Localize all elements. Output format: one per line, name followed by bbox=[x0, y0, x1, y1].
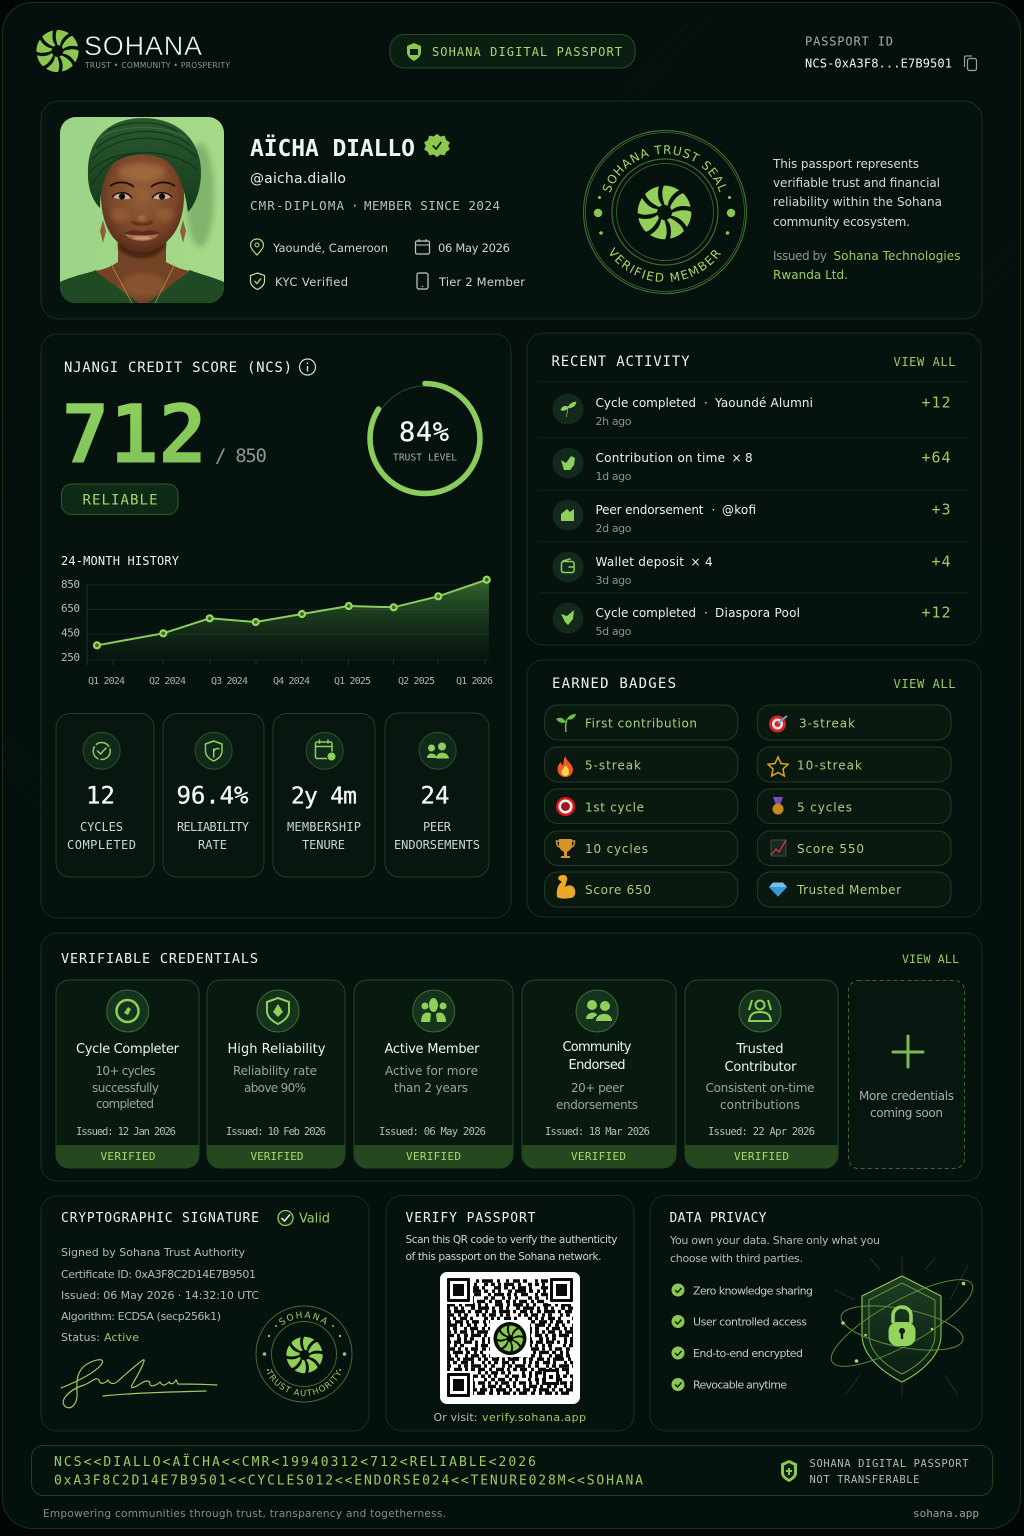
credential: cycle completer: VERIFIED bbox=[100, 1150, 156, 1163]
activity row: endorsement: 2d ago bbox=[596, 522, 632, 535]
passport id: PASSPORT ID bbox=[805, 34, 893, 48]
panel: data privacy bbox=[650, 1196, 983, 1431]
line chart: 24 month history: Q3 2024 bbox=[211, 676, 248, 687]
credential: more coming soon: More credentials bbox=[859, 1089, 954, 1103]
signature details: Active bbox=[104, 1331, 139, 1344]
stat: cycles completed: CYCLES bbox=[80, 820, 123, 834]
badge: 5 cycles: 5 cycles bbox=[797, 800, 852, 814]
trust gauge: 84% bbox=[399, 417, 449, 448]
tier bbox=[417, 273, 525, 289]
activity row: cycle yaounde: 2h ago bbox=[596, 415, 632, 428]
credential: high reliability: Issued: 10 Feb 2026 bbox=[226, 1126, 326, 1138]
panel: verifiable credentials bbox=[41, 933, 982, 1181]
panel: cryptographic signature bbox=[40, 1196, 370, 1432]
privacy checklist: Revocable anytime bbox=[693, 1378, 787, 1392]
member line: MEMBER SINCE 2024 bbox=[364, 198, 500, 213]
nose bbox=[132, 221, 152, 225]
logo mark bbox=[34, 28, 81, 74]
credential: active member: Active Member bbox=[384, 1042, 480, 1057]
line chart: 24 month history: 450 bbox=[61, 626, 80, 640]
badge: 1st cycle bbox=[545, 789, 738, 824]
machine readable zone bbox=[32, 1446, 992, 1496]
line chart: 24 month history bbox=[61, 577, 493, 687]
header bbox=[34, 28, 977, 74]
badge: 10 cycles bbox=[545, 831, 738, 866]
credential: active member: VERIFIED bbox=[406, 1150, 461, 1163]
member line: · bbox=[351, 198, 359, 213]
credential: community endorsed: VERIFIED bbox=[571, 1150, 626, 1163]
panel: profile bbox=[40, 100, 982, 320]
signature details: Signed by Sohana Trust Authority bbox=[61, 1246, 245, 1259]
issuer bbox=[773, 249, 960, 282]
line chart: 24 month history: Q1 2024 bbox=[88, 676, 125, 687]
panel: verify passport bbox=[386, 1196, 634, 1431]
credential: community endorsed: endorsements bbox=[556, 1098, 638, 1112]
valid status: Valid bbox=[299, 1212, 330, 1226]
credential: trusted contributor: Consistent on-time bbox=[706, 1081, 814, 1095]
badge: 3-streak bbox=[757, 705, 951, 740]
description bbox=[669, 1234, 880, 1265]
activity row: wallet: × bbox=[690, 555, 701, 569]
badge: score 650: Score 650 bbox=[585, 883, 651, 897]
line chart: 24 month history: 850 bbox=[61, 578, 80, 591]
line chart: 24 month history: 250 bbox=[61, 651, 80, 664]
stat: reliability rate: 96.4% bbox=[176, 782, 249, 810]
turban bbox=[88, 118, 201, 212]
badge: trusted member bbox=[757, 872, 951, 907]
privacy checklist: End-to-end encrypted bbox=[693, 1347, 803, 1360]
activity row: cycle diaspora: +12 bbox=[922, 604, 950, 622]
credential: cycle completer: completed bbox=[96, 1097, 154, 1111]
member line: CMR-DIPLOMA bbox=[250, 198, 344, 213]
credential: cycle completer: successfully bbox=[92, 1081, 159, 1095]
badge: score 650 bbox=[545, 872, 738, 907]
credential: community endorsed: 20+ peer bbox=[571, 1081, 624, 1095]
stat: membership tenure: TENURE bbox=[302, 838, 345, 852]
badge: 10-streak bbox=[757, 747, 951, 782]
credential: cycle completer bbox=[56, 980, 199, 1168]
stat: cycles completed: COMPLETED bbox=[67, 838, 136, 852]
date bbox=[416, 239, 510, 255]
member line bbox=[250, 198, 500, 213]
handwritten signature bbox=[61, 1360, 217, 1408]
activity row: cycle diaspora: 5d ago bbox=[596, 625, 632, 638]
panel: recent activity bbox=[527, 333, 981, 645]
credential: high reliability: Reliability rate bbox=[233, 1064, 317, 1078]
badge: 10 cycles: 10 cycles bbox=[585, 842, 648, 856]
line chart: 24 month history: Q2 2025 bbox=[398, 676, 435, 687]
score value: 712 bbox=[61, 388, 207, 482]
date: 06 May 2026 bbox=[438, 241, 510, 255]
machine readable zone: 0xA3F8C2D14E7B9501<<CYCLES012<<ENDORSE024<<TENURE028M<<SOHANA bbox=[54, 1474, 643, 1488]
kyc: KYC Verified bbox=[275, 275, 348, 289]
icon: shield with lock bbox=[821, 1257, 983, 1397]
credential: high reliability bbox=[207, 980, 345, 1168]
credential: more coming soon: coming soon bbox=[870, 1106, 943, 1120]
face bbox=[101, 150, 184, 252]
credential: trusted contributor: contributions bbox=[720, 1098, 800, 1112]
description: of this passport on the Sohana network. bbox=[406, 1251, 602, 1263]
issuer: Issued by bbox=[773, 249, 827, 263]
tier: Tier 2 Member bbox=[438, 275, 525, 289]
passport id bbox=[805, 34, 976, 70]
view all link: VIEW ALL bbox=[894, 677, 956, 691]
trust seal bbox=[582, 130, 748, 294]
credential: community endorsed bbox=[522, 980, 676, 1168]
reliable pill bbox=[62, 484, 178, 514]
score max: / 850 bbox=[215, 445, 267, 467]
activity row: wallet: 3d ago bbox=[596, 574, 632, 587]
credential: cycle completer: 10+ cycles bbox=[96, 1064, 156, 1078]
passport id: NCS-0xA3F8...E7B9501 bbox=[805, 56, 952, 70]
activity row: cycle yaounde: +12 bbox=[922, 394, 950, 412]
panel: njangi credit score bbox=[41, 334, 511, 918]
not transferable note: SOHANA DIGITAL PASSPORT bbox=[810, 1458, 969, 1470]
stat: membership tenure bbox=[273, 714, 375, 877]
activity row: cycle yaounde bbox=[552, 394, 950, 428]
footer bbox=[43, 1507, 979, 1520]
stat: peer endorsements: PEER bbox=[423, 820, 452, 834]
activity row: cycle diaspora bbox=[552, 602, 950, 638]
stat: reliability rate: RATE bbox=[198, 838, 227, 852]
passport description: This passport represents bbox=[772, 157, 919, 171]
activity row: cycle diaspora: Diaspora Pool bbox=[715, 606, 800, 620]
credential: trusted contributor: Trusted bbox=[736, 1042, 784, 1057]
trust seal: VERIFIED MEMBER bbox=[610, 247, 722, 282]
activity row: contribution: Contribution on time bbox=[596, 451, 725, 465]
trust gauge bbox=[370, 384, 480, 494]
description: choose with third parties. bbox=[670, 1252, 803, 1265]
credential: high reliability: High Reliability bbox=[228, 1042, 326, 1057]
stat: membership tenure: MEMBERSHIP bbox=[287, 820, 361, 834]
activity row: cycle yaounde: Yaoundé Alumni bbox=[714, 396, 813, 410]
activity row: cycle yaounde: · bbox=[704, 396, 708, 410]
title pill: SOHANA DIGITAL PASSPORT bbox=[432, 45, 622, 59]
lips bbox=[124, 230, 160, 235]
footer: sohana.app bbox=[913, 1507, 979, 1520]
badge: 1st cycle: 1st cycle bbox=[585, 800, 644, 814]
credential: trusted contributor: VERIFIED bbox=[734, 1150, 789, 1163]
credential: more coming soon bbox=[848, 980, 964, 1168]
credential: cycle completer: Cycle Completer bbox=[76, 1042, 180, 1057]
line chart: 24 month history: Q1 2026 bbox=[456, 676, 493, 687]
badge: trusted member: Trusted Member bbox=[796, 883, 901, 897]
badge: score 550 bbox=[757, 831, 951, 866]
activity row: cycle diaspora: · bbox=[704, 606, 708, 620]
activity row: endorsement: Peer endorsement bbox=[596, 503, 704, 517]
panel: earned badges bbox=[527, 660, 981, 917]
stat: membership tenure: 2y 4m bbox=[291, 784, 357, 810]
credential: trusted contributor: Issued: 22 Apr 2026 bbox=[708, 1126, 815, 1138]
credential: high reliability: VERIFIED bbox=[250, 1150, 304, 1163]
verify link: Or visit: bbox=[434, 1411, 478, 1424]
kyc bbox=[250, 273, 348, 290]
badge: 5 cycles bbox=[757, 789, 951, 824]
stat: cycles completed: 12 bbox=[86, 782, 115, 810]
panel heading: DATA PRIVACY bbox=[670, 1211, 767, 1226]
icon: verified badge bbox=[424, 134, 450, 157]
not transferable note bbox=[810, 1458, 969, 1486]
icon: shield badge bbox=[781, 1460, 797, 1482]
credential: community endorsed: Community bbox=[562, 1040, 632, 1055]
badge: first contribution: First contribution bbox=[585, 716, 697, 730]
portrait photo bbox=[60, 117, 224, 306]
line chart: 24 month history: 650 bbox=[61, 602, 80, 615]
trust seal: SOHANA TRUST SEAL bbox=[602, 145, 726, 192]
reliable pill: RELIABLE bbox=[82, 492, 158, 508]
activity row: contribution bbox=[552, 448, 950, 483]
activity row: contribution: 1d ago bbox=[596, 470, 632, 483]
name: AÏCHA DIALLO bbox=[250, 134, 415, 162]
stat: peer endorsements: 24 bbox=[420, 782, 450, 810]
panel heading: NJANGI CREDIT SCORE (NCS) bbox=[64, 360, 292, 376]
line chart: 24 month history: Q4 2024 bbox=[273, 676, 310, 687]
panel heading: VERIFIABLE CREDENTIALS bbox=[61, 951, 258, 967]
description bbox=[406, 1234, 618, 1263]
passport description: reliability within the Sohana bbox=[773, 195, 942, 209]
activity row: cycle yaounde: Cycle completed bbox=[596, 396, 696, 410]
trust gauge: TRUST LEVEL bbox=[393, 452, 457, 464]
activity row: contribution: +64 bbox=[922, 448, 950, 466]
brand name: SOHANA bbox=[84, 31, 202, 61]
privacy checklist bbox=[672, 1284, 813, 1392]
activity row: endorsement: · bbox=[712, 503, 715, 517]
signature details: Issued: 06 May 2026 · 14:32:10 UTC bbox=[61, 1289, 259, 1302]
verify link: verify.sohana.app bbox=[482, 1411, 586, 1424]
activity row: cycle diaspora: Cycle completed bbox=[596, 606, 696, 620]
activity row: wallet: 4 bbox=[705, 555, 713, 569]
footer: Empowering communities through trust, transparency and togetherness. bbox=[43, 1508, 446, 1520]
signature details: Algorithm: ECDSA (secp256k1) bbox=[61, 1310, 221, 1323]
credential: active member bbox=[354, 980, 513, 1168]
credential: active member: Active for more bbox=[385, 1064, 478, 1078]
brows and eyes bbox=[110, 182, 175, 187]
tagline: TRUST • COMMUNITY • PROSPERITY bbox=[84, 61, 230, 70]
qr code bbox=[440, 1272, 580, 1404]
machine readable zone: NCS<<DIALLO<AÏCHA<<CMR<19940312<712<RELIABLE<2026 bbox=[54, 1454, 536, 1470]
icon: info bbox=[300, 359, 316, 375]
description: You own your data. Share only what you bbox=[669, 1234, 880, 1247]
location: Yaoundé, Cameroon bbox=[272, 241, 388, 255]
credential: trusted contributor bbox=[685, 980, 838, 1168]
verify link bbox=[434, 1411, 586, 1424]
valid status bbox=[278, 1210, 330, 1226]
view all link: VIEW ALL bbox=[902, 952, 959, 966]
stat: peer endorsements: ENDORSEMENTS bbox=[394, 838, 480, 852]
issuer: Rwanda Ltd. bbox=[773, 268, 848, 282]
panel heading: CRYPTOGRAPHIC SIGNATURE bbox=[61, 1211, 259, 1226]
stat: reliability rate bbox=[163, 714, 264, 877]
signature details: Certificate ID: 0xA3F8C2D14E7B9501 bbox=[61, 1268, 256, 1281]
badge: 3-streak: 3-streak bbox=[799, 716, 855, 730]
privacy checklist: Zero knowledge sharing bbox=[693, 1284, 813, 1298]
credential: active member: than 2 years bbox=[394, 1081, 468, 1095]
activity row: contribution: × bbox=[732, 451, 742, 465]
privacy checklist: User controlled access bbox=[693, 1316, 807, 1328]
passport description bbox=[772, 157, 942, 229]
badge: 5-streak: 5-streak bbox=[585, 758, 641, 772]
activity row: contribution: 8 bbox=[745, 451, 753, 465]
chart heading: 24-MONTH HISTORY bbox=[61, 554, 180, 568]
stat: reliability rate: RELIABILITY bbox=[177, 820, 250, 834]
activity row: endorsement: +3 bbox=[932, 500, 950, 518]
credential: community endorsed: Issued: 18 Mar 2026 bbox=[545, 1126, 650, 1138]
view all link: VIEW ALL bbox=[894, 355, 956, 369]
activity row: endorsement bbox=[552, 500, 950, 535]
activity row: wallet: +4 bbox=[932, 552, 950, 570]
activity row: endorsement: @kofi bbox=[722, 503, 756, 517]
credential: high reliability: above 90% bbox=[244, 1081, 306, 1095]
badge: first contribution bbox=[545, 705, 738, 740]
line chart: 24 month history: Q2 2024 bbox=[149, 676, 186, 687]
stat: peer endorsements bbox=[385, 713, 489, 877]
description: Scan this QR code to verify the authenticity bbox=[406, 1234, 618, 1246]
signature details: Status: bbox=[61, 1331, 100, 1344]
not transferable note: NOT TRANSFERABLE bbox=[810, 1474, 920, 1486]
credential: active member: Issued: 06 May 2026 bbox=[379, 1126, 486, 1138]
passport description: community ecosystem. bbox=[773, 215, 910, 229]
credential: trusted contributor: Contributor bbox=[724, 1060, 797, 1075]
credential: cycle completer: Issued: 12 Jan 2026 bbox=[76, 1126, 176, 1138]
badge: score 550: Score 550 bbox=[797, 842, 864, 856]
trust authority seal: TRUST AUTHORITY bbox=[267, 1368, 341, 1396]
panel heading: EARNED BADGES bbox=[552, 676, 676, 692]
trust authority seal bbox=[256, 1306, 352, 1402]
activity row: wallet bbox=[552, 552, 950, 587]
clothes left bbox=[60, 270, 224, 306]
panel heading: RECENT ACTIVITY bbox=[552, 354, 690, 370]
earrings bbox=[100, 220, 106, 243]
line chart: 24 month history: Q1 2025 bbox=[334, 676, 371, 687]
badge: 5-streak bbox=[545, 747, 738, 782]
signature details bbox=[61, 1246, 259, 1344]
badge: 10-streak: 10-streak bbox=[797, 758, 862, 772]
stat: cycles completed bbox=[56, 714, 154, 877]
credential: community endorsed: Endorsed bbox=[568, 1058, 626, 1073]
passport description: verifiable trust and financial bbox=[773, 176, 940, 190]
title pill bbox=[390, 34, 635, 68]
trust authority seal: SOHANA bbox=[279, 1312, 326, 1325]
panel heading: VERIFY PASSPORT bbox=[406, 1211, 536, 1226]
issuer: Sohana Technologies bbox=[834, 249, 960, 263]
handle: @aicha.diallo bbox=[250, 171, 346, 187]
activity row: wallet: Wallet deposit bbox=[596, 555, 684, 569]
